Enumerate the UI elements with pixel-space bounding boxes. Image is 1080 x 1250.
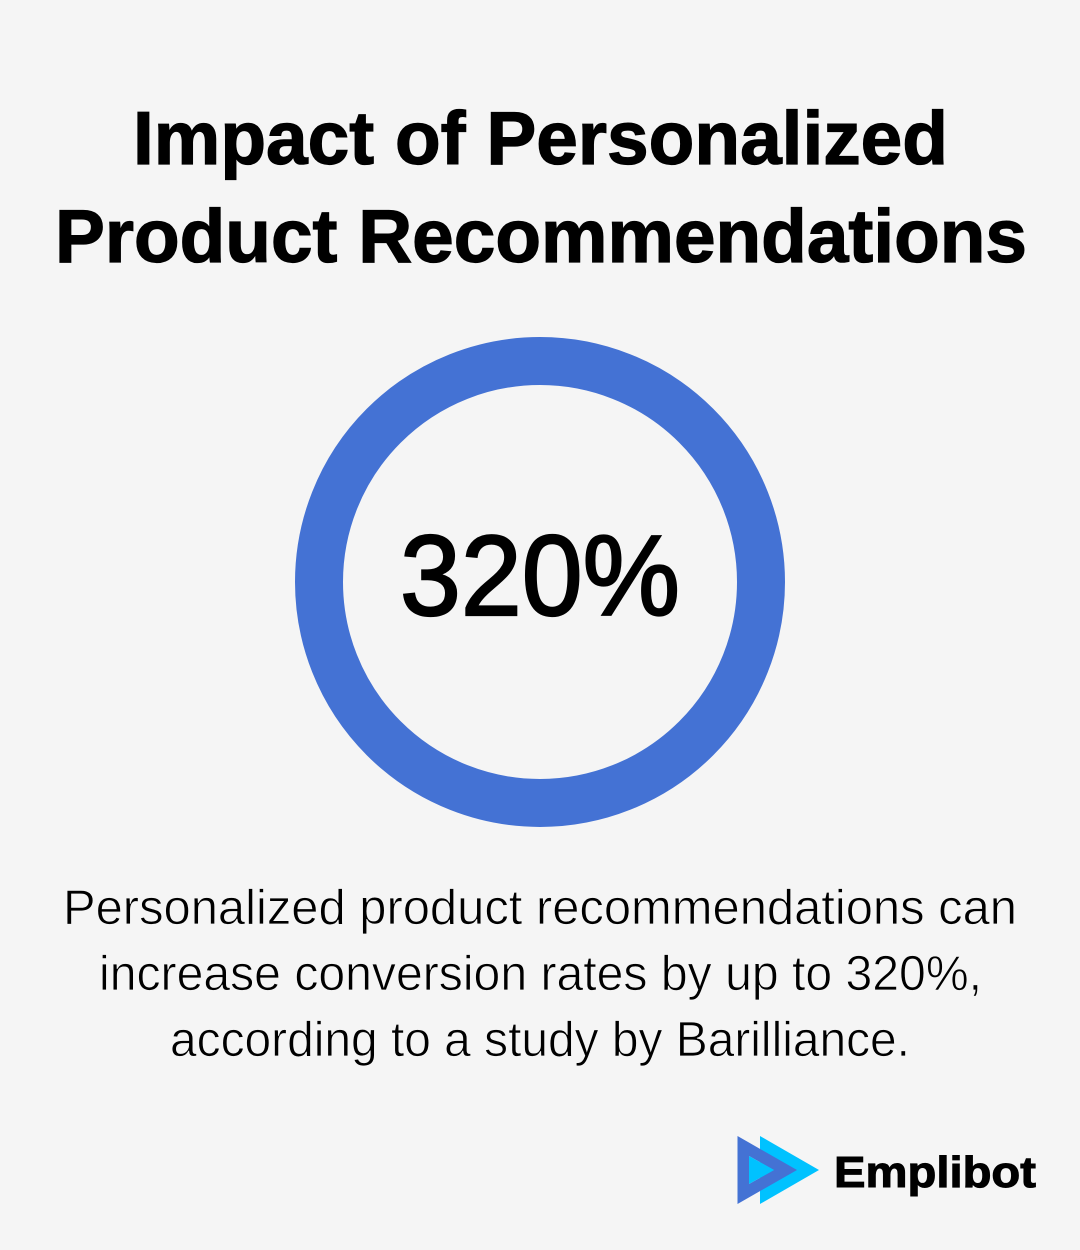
logo wordmark: Emplibot [834, 1148, 1036, 1197]
title [55, 96, 1027, 278]
logo: Emplibot [738, 1136, 1036, 1204]
big number: 320% [400, 513, 680, 640]
description text: increase conversion rates by up to 320%, [99, 947, 982, 1001]
description text: according to a study by Barilliance. [170, 1013, 910, 1067]
title: Product Recommendations [55, 194, 1027, 278]
description text [63, 881, 1017, 1067]
title: Impact of Personalized [133, 96, 948, 180]
ring chart: 320% [319, 361, 761, 803]
icon: play triangles [738, 1136, 819, 1204]
description text: Personalized product recommendations can [63, 881, 1017, 935]
